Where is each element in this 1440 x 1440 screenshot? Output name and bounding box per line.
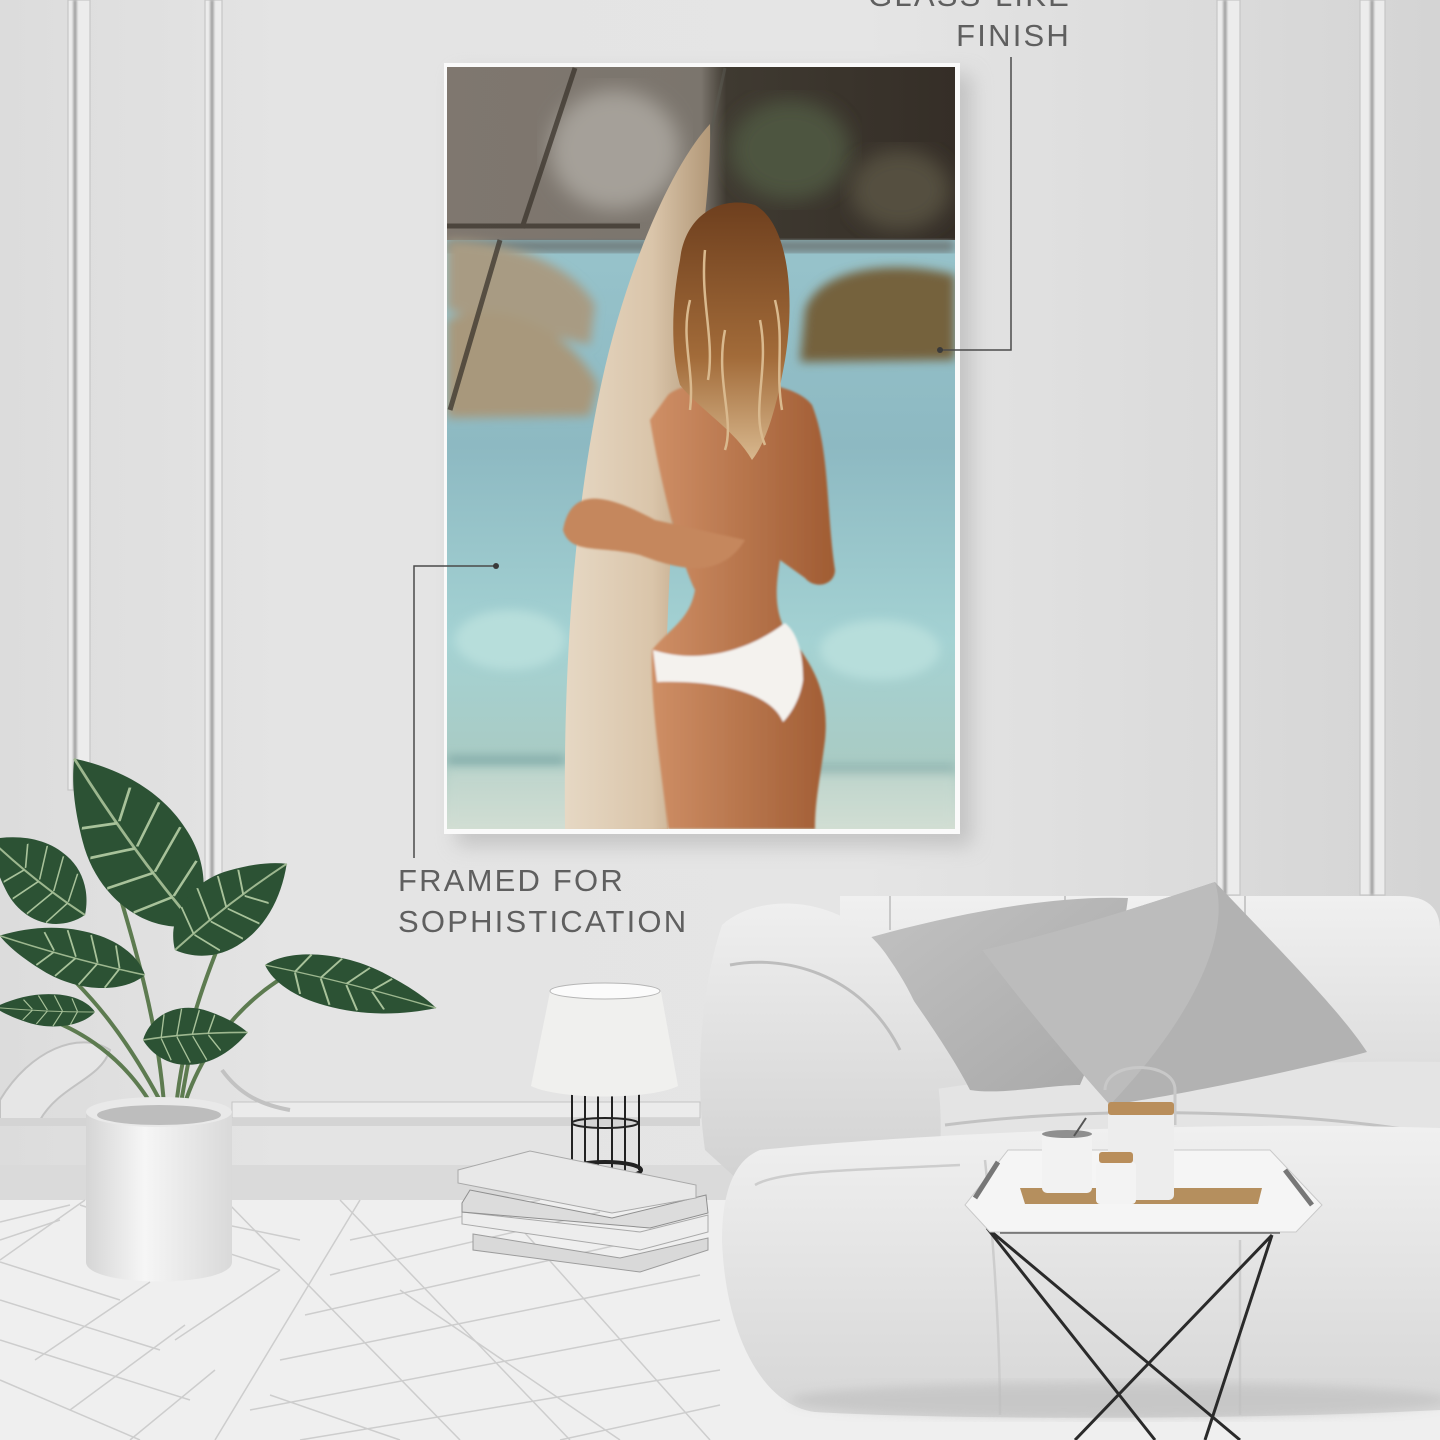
- floor with herringbone planks: [0, 1165, 1440, 1440]
- wall moulding panels: [0, 0, 1385, 1126]
- ceramic jars and cups: [1042, 1068, 1175, 1204]
- hair: [673, 202, 790, 460]
- stacked books: [458, 1151, 708, 1272]
- callout text: FINISH: [956, 18, 1071, 53]
- surfboard: [565, 124, 710, 829]
- table lamp on books: [458, 983, 708, 1272]
- callout leader line: [940, 57, 1011, 350]
- framed artwork: [444, 63, 972, 846]
- seat cushions: [930, 1062, 1440, 1240]
- potted monstera plant: [0, 734, 442, 1282]
- abstract figure: [563, 381, 835, 829]
- callout: framed for sophistication: [398, 563, 688, 939]
- white pot: [86, 1100, 232, 1282]
- sofa arm: [700, 903, 941, 1200]
- tray: [965, 1150, 1322, 1232]
- sofa front cushion: [722, 1126, 1440, 1418]
- stems: [20, 830, 320, 1120]
- table legs: [987, 1228, 1280, 1440]
- callout: glass-like finish: [868, 0, 1071, 353]
- white sofa: [700, 882, 1440, 1418]
- artwork photo: [447, 67, 955, 829]
- grey cushions: [868, 898, 1128, 1091]
- lamp cage base: [569, 1094, 641, 1178]
- callout leader line: [414, 566, 496, 858]
- sofa back: [840, 896, 1440, 1140]
- lamp shade: [531, 984, 678, 1096]
- white frame: [444, 63, 960, 834]
- frame shadow: [456, 74, 972, 846]
- leaves: [26, 734, 240, 953]
- side table with tray: [965, 1068, 1322, 1440]
- callout text: SOPHISTICATION: [398, 904, 688, 939]
- callout text: FRAMED FOR: [398, 863, 625, 898]
